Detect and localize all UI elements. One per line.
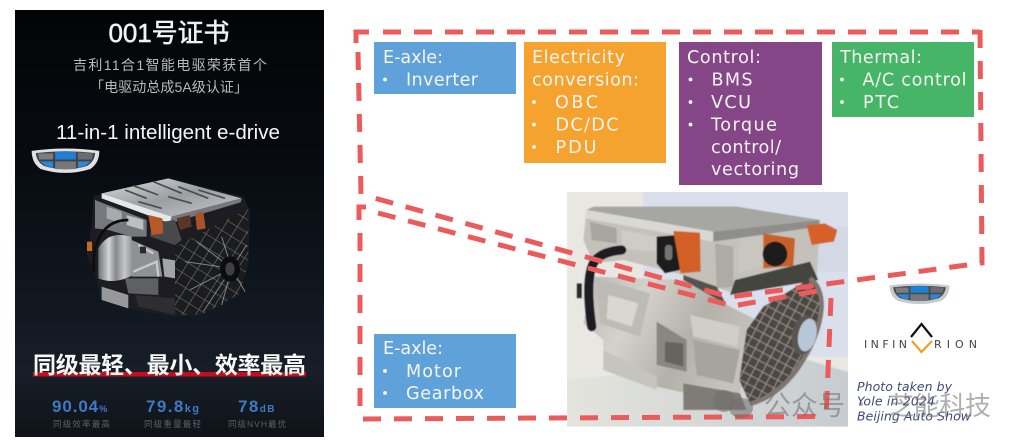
panel: electricity conversion: DC/DC	[556, 116, 618, 136]
panel: electricity conversion: conversion:	[532, 70, 639, 90]
poster slogan: 同级最轻、最小、效率最高	[33, 352, 306, 378]
metric: weight: 79.8kg	[146, 397, 200, 416]
photo credit: Yole in 2024	[857, 394, 935, 408]
poster subtitle: 吉利11合1智能电驱荣获首个	[73, 57, 267, 73]
panel: control: VCU	[711, 93, 751, 113]
poster title: 001号证书	[108, 18, 230, 48]
panel: E-axle motor and gearbox	[374, 334, 516, 408]
panel: E-axle inverter: E-axle:	[383, 48, 443, 68]
photo credit	[857, 379, 972, 424]
photo credit: Beijing Auto Show	[857, 408, 972, 424]
icon: Infinivision logo: RION	[934, 338, 977, 351]
metric: noise: 78dB	[238, 397, 276, 416]
dashed outline: lower e-axle module	[359, 207, 831, 420]
English caption: 11-in-1 intelligent e-drive	[56, 121, 280, 144]
panel: control: vectoring	[711, 160, 799, 180]
panel: control: Torque	[710, 116, 777, 136]
panel: E-axle inverter	[374, 42, 516, 94]
panel: electricity conversion: PDU	[556, 138, 596, 158]
watermark	[713, 390, 991, 421]
photo credit: Photo taken by	[857, 379, 953, 394]
panel: control: control/	[711, 138, 781, 158]
icon: Geely logo small	[890, 284, 950, 304]
photo: e-drive at Beijing Auto Show	[567, 190, 850, 427]
icon: Infinivision logo	[864, 324, 977, 352]
panel: E-axle motor and gearbox: Motor	[406, 362, 462, 382]
panel: E-axle inverter: Inverter	[406, 70, 479, 90]
poster subtitle: 「电驱动总成5A级认证」	[90, 79, 248, 95]
panel: Geely poster	[15, 10, 324, 437]
panel: electricity conversion: OBC	[555, 93, 598, 113]
panel: E-axle motor and gearbox: E-axle:	[383, 339, 443, 359]
metric: weight	[144, 397, 201, 429]
panel: E-axle motor and gearbox: Gearbox	[406, 384, 484, 404]
watermark: 芝能科技	[888, 391, 991, 421]
icon: Geely logo	[32, 148, 100, 173]
panel: electricity conversion	[524, 42, 666, 163]
panel: thermal: Thermal:	[839, 48, 922, 68]
illustration: dark e-drive motor	[87, 178, 250, 317]
panel: thermal	[832, 42, 974, 117]
metric: weight: 同级重量最轻	[144, 419, 201, 429]
panel: control	[679, 42, 822, 185]
panel: control: BMS	[712, 70, 752, 90]
watermark: 公众号	[764, 391, 845, 421]
metric: efficiency: 90.04%	[52, 397, 108, 416]
metric: efficiency	[52, 397, 110, 429]
panel: control: Control:	[687, 48, 761, 68]
metric: noise: 同级NVH最优	[228, 419, 286, 429]
icon: Infinivision logo: INFIN	[864, 338, 907, 351]
panel: thermal: PTC	[863, 93, 899, 113]
metric: noise	[228, 397, 286, 429]
poster subtitle	[73, 57, 267, 95]
panel: thermal: A/C control	[862, 70, 966, 90]
panel: electricity conversion: Electricity	[532, 48, 625, 68]
dashed outline: upper inverter module	[356, 30, 982, 297]
metric: efficiency: 同级效率最高	[53, 419, 110, 429]
